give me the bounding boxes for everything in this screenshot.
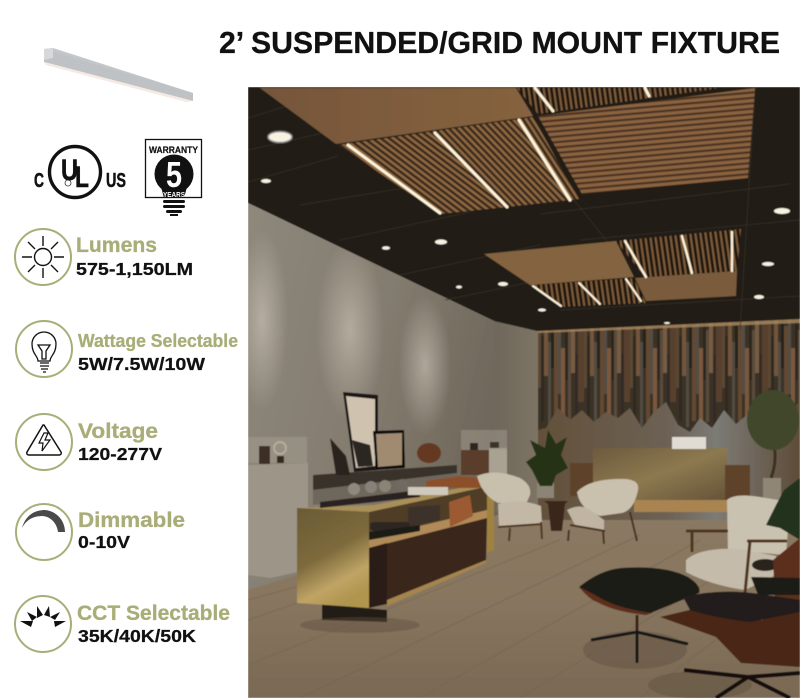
linear light strips bbox=[348, 88, 732, 306]
icon: cUL US certification: U bbox=[61, 154, 78, 187]
armchair: white centre bbox=[567, 479, 638, 544]
icon: 5 year warranty: 5 bbox=[166, 154, 182, 195]
recessed downlights bbox=[261, 132, 790, 324]
lounge chair bbox=[660, 538, 800, 698]
icon: cUL US certification bbox=[34, 146, 126, 198]
slat panel: lower right bbox=[616, 229, 741, 278]
icon: sun bbox=[15, 229, 71, 285]
feature: wattage selectable: 5W/7.5W/10W bbox=[78, 354, 206, 374]
slat panel: upper diagonal bbox=[338, 117, 579, 214]
feature: wattage selectable bbox=[16, 321, 238, 377]
feature: wattage selectable: Wattage Selectable bbox=[78, 331, 238, 351]
product image: linear fixture bbox=[44, 48, 193, 102]
wood panel: lower bbox=[484, 241, 634, 285]
floor planks bbox=[280, 535, 668, 698]
ceiling bbox=[248, 87, 800, 331]
icon: 5 year warranty bbox=[146, 140, 202, 216]
armchair: white right bbox=[686, 496, 790, 593]
ceiling tile grid bbox=[248, 90, 800, 330]
feature: lumens bbox=[15, 229, 193, 285]
feature: voltage: Voltage bbox=[78, 420, 158, 443]
potted plant bbox=[526, 430, 568, 498]
title: 2’ SUSPENDED/GRID MOUNT FIXTURE bbox=[219, 25, 780, 60]
photo: retail interior with suspended ceiling fixtures bbox=[236, 87, 800, 698]
left wall bbox=[248, 203, 547, 590]
icon: voltage triangle bbox=[16, 414, 72, 470]
icon: half sunburst bbox=[15, 596, 71, 652]
side table bbox=[544, 501, 568, 531]
icon: dimmer arc bbox=[16, 504, 72, 560]
feature: lumens: Lumens bbox=[76, 234, 157, 257]
slat panel: lower bottom bbox=[530, 278, 646, 307]
feature wall: wood strips bbox=[538, 318, 800, 520]
display plinth bbox=[248, 437, 308, 578]
ottoman bbox=[579, 567, 700, 663]
wood panel: upper bbox=[260, 88, 533, 144]
floor bbox=[248, 497, 800, 698]
feature: dimmable: 0-10V bbox=[78, 532, 130, 552]
plant leaves: right bbox=[766, 478, 800, 540]
icon: cUL US certification: C bbox=[34, 170, 44, 192]
feature: dimmable bbox=[16, 504, 185, 560]
floor shadows bbox=[300, 617, 752, 698]
icon: cUL US certification: US bbox=[106, 170, 126, 192]
display counter bbox=[297, 476, 494, 622]
icon: light bulb bbox=[16, 321, 72, 377]
slat panel: horizontal bbox=[538, 88, 755, 194]
shelf and display case bbox=[313, 430, 507, 505]
feature: voltage: 120-277V bbox=[78, 444, 162, 464]
feature: CCT selectable: 35K/40K/50K bbox=[78, 626, 196, 646]
handbag bbox=[417, 443, 441, 463]
icon: cUL US certification: L bbox=[75, 161, 89, 194]
feature: dimmable: Dimmable bbox=[78, 509, 185, 532]
icon: 5 year warranty: YEARS bbox=[163, 190, 185, 199]
feature: CCT selectable: CCT Selectable bbox=[77, 602, 230, 625]
armchair: white left bbox=[477, 472, 542, 541]
reception desk bbox=[570, 437, 752, 512]
wall spotlights bbox=[248, 248, 447, 426]
feature: voltage bbox=[16, 414, 162, 470]
tree bbox=[747, 390, 799, 503]
wood panel: lower right bbox=[635, 271, 737, 301]
slat panel: top bbox=[517, 88, 720, 114]
framed art bbox=[330, 392, 405, 475]
icon: 5 year warranty: WARRANTY bbox=[149, 145, 199, 156]
feature: lumens: 575-1,150LM bbox=[76, 259, 193, 279]
feature: CCT selectable bbox=[15, 596, 230, 652]
